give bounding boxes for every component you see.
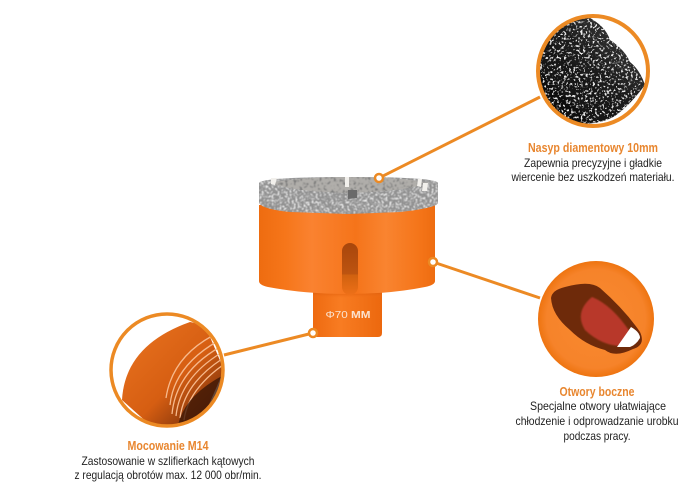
slot opening [551,284,642,354]
text block: diamond coating: Nasyp diamentowy 10mm [528,140,658,155]
shank marking: Φ70 MM [326,310,370,321]
connector: side holes [433,262,540,298]
connector: diamond coating [379,97,540,178]
text block: side holes [516,384,678,443]
orange body [259,205,435,294]
text block: side holes: Specjalne otwory ułatwiające [530,399,666,413]
text block: M14 mount [74,438,262,482]
band notches [271,177,428,191]
detail circle: side holes [538,261,654,377]
text block: M14 mount: Mocowanie M14 [128,438,209,453]
detail circle: diamond coating [535,14,648,126]
drill bit [259,177,438,337]
diamond band [259,177,438,214]
text block: M14 mount: z regulacją obrotów max. 12 000 obr/min. [74,468,262,482]
side slot [342,243,358,295]
text block: M14 mount: Zastosowanie w szlifierkach kątowych [82,454,254,468]
text block: side holes: podczas pracy. [564,429,630,443]
text block: diamond coating: Zapewnia precyzyjne i gładkie [524,156,662,170]
red granules [581,297,630,346]
detail circle: M14 mount [111,314,224,426]
shank [313,285,382,337]
shank shadow [313,292,382,304]
text block: diamond coating [511,140,674,184]
text block: side holes: Otwory boczne [560,384,634,399]
connector dots [309,174,437,337]
band inner rim [270,177,430,193]
white highlight [617,327,640,347]
connector: M14 mount [224,333,313,355]
thread lines [166,336,223,420]
